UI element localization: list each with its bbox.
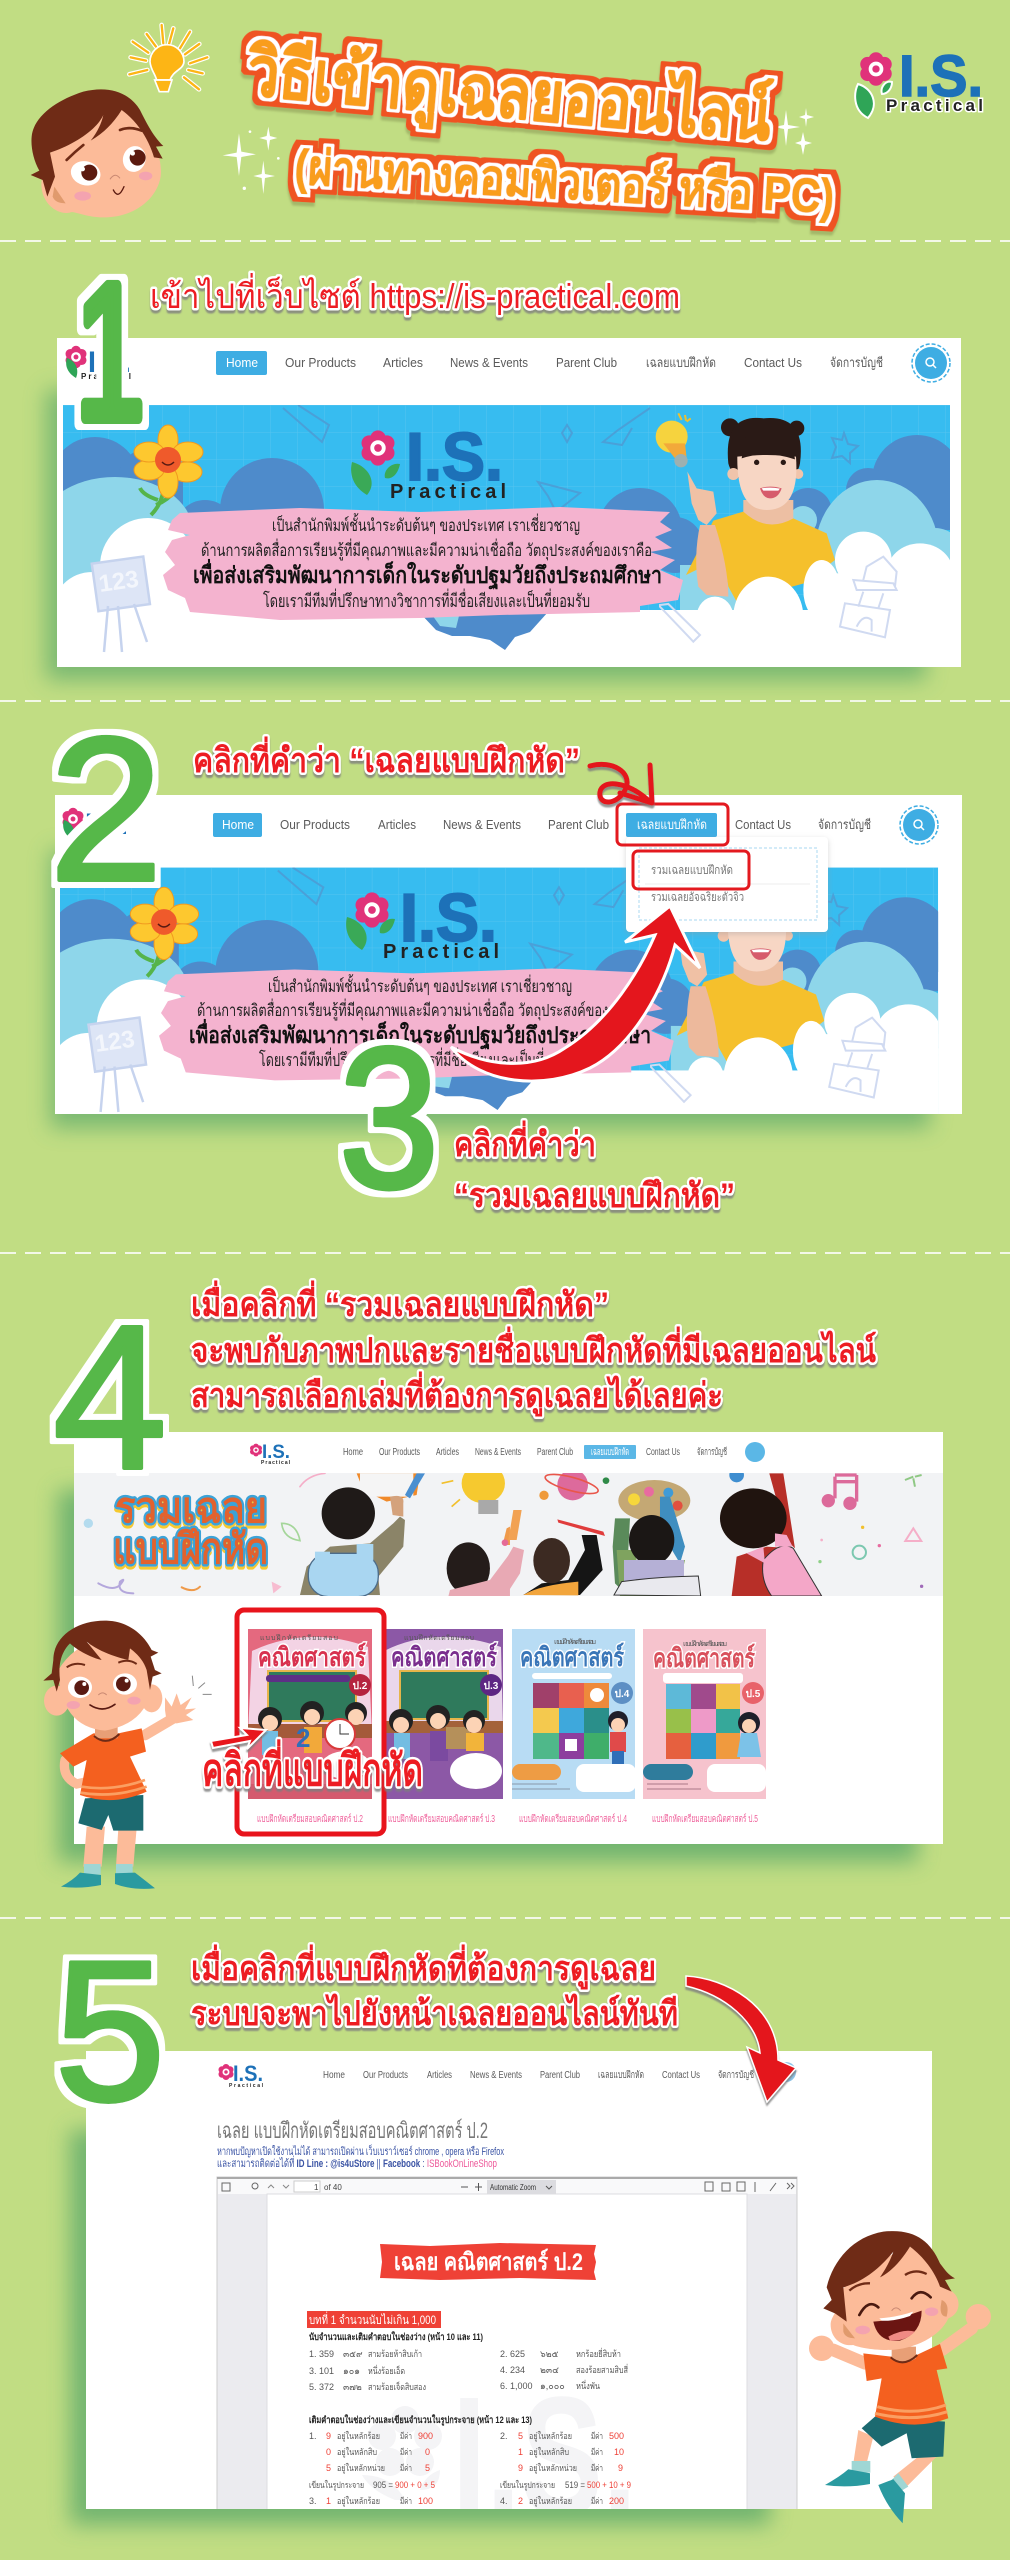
- logo: [66, 346, 131, 381]
- step 4 text: จะพบกับภาพปกและรายชื่อแบบฝึกหัดที่มีเฉลยออนไลน์: [191, 1326, 876, 1370]
- nav bar: จัดการบัญชี: [830, 355, 883, 370]
- banner copy: โดยเรามีทีมที่ปรึกษาทางวิชาการที่มีชื่อเสียงและเป็นที่ยอมรับ: [259, 1047, 582, 1070]
- highlight box: menu item: [617, 804, 728, 845]
- logo: Practical: [81, 372, 131, 381]
- answers section 2: 0: [326, 2447, 331, 2457]
- answers section 1: 1. 359: [309, 2349, 334, 2359]
- answers section 2: มีค่า: [400, 2431, 412, 2441]
- nav bar: Our Products: [280, 817, 350, 832]
- book cover: grade 3: ป.3: [484, 1680, 499, 1692]
- nav bar: Articles: [378, 817, 416, 832]
- step 3 text: คลิกที่คำว่า: [454, 1120, 596, 1164]
- nav bar: Parent Club: [556, 355, 617, 370]
- book cover: grade 4: คณิตศาสตร์: [520, 1642, 624, 1672]
- answers section 2: 2: [518, 2496, 523, 2506]
- answers section 1: 6. 1,000: [500, 2381, 533, 2391]
- panel: step 1 website: [37, 338, 965, 680]
- book cover: grade 2: ป.2: [353, 1680, 368, 1692]
- book cover: grade 4: [512, 1629, 636, 1799]
- logo: Practical: [229, 2083, 264, 2089]
- watermark: [362, 2396, 628, 2509]
- book cover: grade 4: แบบฝึกหัดเตรียมสอบ: [554, 1637, 596, 1646]
- book cover: grade 2: คณิตศาสตร์: [258, 1642, 366, 1672]
- answers section 2: อยู่ในหลักหน่วย: [337, 2463, 385, 2474]
- logo: I.S.: [88, 346, 131, 379]
- number 2: 2: [49, 695, 163, 924]
- answers section 2: 100: [418, 2496, 433, 2506]
- pdf viewer: [216, 2176, 798, 2509]
- banner logo: Practical: [390, 481, 506, 503]
- logo: Practical: [261, 1460, 291, 1466]
- answers section 2: 9: [326, 2431, 331, 2441]
- nav bar: News & Events: [470, 2070, 522, 2081]
- answers section 2: เขียนในรูปกระจาย: [309, 2480, 364, 2491]
- highlight box: first book: [237, 1610, 384, 1834]
- panel: step 2 menu: [34, 795, 962, 1133]
- nav bar: เฉลยแบบฝึกหัด: [591, 1446, 629, 1458]
- answers section 1: สามร้อยห้าสิบเก้า: [368, 2349, 422, 2359]
- answers section 1: 2. 625: [500, 2349, 525, 2359]
- number 5: 5: [54, 1920, 166, 2143]
- book cover: grade 2: 2: [296, 1723, 310, 1753]
- nav bar: Contact Us: [735, 817, 791, 832]
- watermark: I.S.: [452, 2362, 637, 2552]
- photo banner: [74, 1463, 943, 1597]
- nav bar: จัดการบัญชี: [818, 817, 871, 832]
- logo top right: Practical: [886, 96, 983, 115]
- answers section 2: มีค่า: [400, 2447, 412, 2457]
- book cover: grade 5: แบบฝึกหัดเตรียมสอบ: [683, 1639, 727, 1648]
- answers section 1: หกร้อยยี่สิบห้า: [576, 2347, 621, 2359]
- nav bar: [323, 2062, 796, 2082]
- banner copy: ด้านการผลิตสื่อการเรียนรู้ที่มีคุณภาพและมีความน่าเชื่อถือ วัตถุประสงค์ของเราคือ: [197, 998, 643, 1021]
- help text: [217, 2144, 504, 2170]
- logo: [250, 1442, 291, 1466]
- nav bar: Our Products: [285, 355, 356, 370]
- banner copy: เป็นสำนักพิมพ์ชั้นนำระดับต้นๆ ของประเทศ เราเชี่ยวชาญ: [268, 974, 572, 996]
- answers section 2: 10: [614, 2447, 624, 2457]
- answers section 2: มีค่า: [591, 2447, 603, 2457]
- nav bar: [213, 806, 938, 844]
- answers section 2: 0: [425, 2447, 430, 2457]
- banner copy: [189, 974, 651, 1070]
- jumping boy: [809, 2231, 991, 2523]
- book cover: grade 5: ป.5: [746, 1688, 761, 1700]
- answers section 2: 5: [326, 2463, 331, 2473]
- step 3 text: “รวมเฉลยแบบฝึกหัด”: [454, 1177, 735, 1215]
- answers section 1: ๓๗๒: [343, 2382, 362, 2392]
- help text: และสามารถติดต่อได้ที่ ID Line : @is4uStore || Facebook : ISBookOnLineShop: [217, 2155, 497, 2170]
- answers section 2: อยู่ในหลักร้อย: [337, 2431, 380, 2442]
- banner logo: Practical: [383, 941, 499, 963]
- answers section 2: อยู่ในหลักร้อย: [529, 2496, 572, 2507]
- easel numbers: 123: [97, 566, 140, 598]
- step 4 text: สามารถเลือกเล่มที่ต้องการดูเฉลยได้เลยค่ะ: [191, 1371, 723, 1417]
- book cover: grade 2: [248, 1629, 372, 1799]
- answers section 1: สองร้อยสามสิบสี่: [576, 2363, 628, 2375]
- answers section 1: หนึ่งร้อยเอ็ด: [368, 2364, 405, 2376]
- nav bar: เฉลยแบบฝึกหัด: [637, 817, 707, 832]
- answers section 2: อยู่ในหลักร้อย: [529, 2431, 572, 2442]
- step 5 text: ระบบจะพาไปยังหน้าเฉลยออนไลน์ทันที: [191, 1993, 678, 2033]
- banner logo: I.S.: [406, 419, 503, 495]
- nav bar: Our Products: [379, 1447, 420, 1458]
- book cover: grade 3: คณิตศาสตร์: [391, 1642, 497, 1672]
- answers section 2: 5: [518, 2431, 523, 2441]
- step 2 text: คลิกที่คำว่า “เฉลยแบบฝึกหัด”: [193, 736, 580, 780]
- large arrow to page: [686, 1976, 796, 2102]
- answers section 1: ๑,๐๐๐: [540, 2381, 565, 2391]
- small red arrow: [211, 1728, 266, 1749]
- pdf toolbar: 1: [314, 2183, 319, 2192]
- nav bar: Articles: [427, 2070, 452, 2081]
- pdf page: [267, 2194, 747, 2524]
- logo: [62, 808, 128, 841]
- book cover: grade 4: ป.4: [615, 1688, 630, 1700]
- sparkles left: [223, 127, 280, 194]
- nav bar: จัดการบัญชี: [718, 2069, 754, 2081]
- answers section 2: 500: [609, 2431, 624, 2441]
- answers section 2: อยู่ในหลักสิบ: [337, 2447, 377, 2458]
- nav bar: Articles: [436, 1447, 459, 1458]
- title line 2: (ผ่านทางคอมพิวเตอร์ หรือ PC): [293, 140, 836, 224]
- nav bar: จัดการบัญชี: [697, 1446, 727, 1458]
- banner copy: โดยเรามีทีมที่ปรึกษาทางวิชาการที่มีชื่อเสียงและเป็นที่ยอมรับ: [263, 588, 590, 611]
- answers section 1: ๑๐๑: [343, 2366, 360, 2376]
- nav bar: Parent Club: [537, 1447, 573, 1458]
- number 3: 3: [339, 1007, 439, 1230]
- answers section 2: 200: [609, 2496, 624, 2506]
- step 3 text: [454, 1120, 735, 1215]
- nav bar: Our Products: [363, 2070, 408, 2081]
- book cover: grade 3: [384, 1629, 503, 1799]
- answers section 2: 905 =: [373, 2480, 393, 2490]
- answers section 1: นับจำนวนและเติมคำตอบในช่องว่าง (หน้า 10 และ 11): [309, 2331, 483, 2343]
- answers section 2: 5: [425, 2463, 430, 2473]
- logo: I.S.: [85, 808, 128, 841]
- answers section 1: 3. 101: [309, 2366, 334, 2376]
- dropdown menu: รวมเฉลยแบบฝึกหัด: [651, 863, 733, 877]
- nav bar: Parent Club: [548, 817, 609, 832]
- step 4 text: เมื่อคลิกที่ “รวมเฉลยแบบฝึกหัด”: [191, 1280, 609, 1324]
- banner copy: เป็นสำนักพิมพ์ชั้นนำระดับต้นๆ ของประเทศ เราเชี่ยวชาญ: [272, 513, 580, 535]
- book captions: แบบฝึกหัดเตรียมสอบคณิตศาสตร์ ป.4: [519, 1813, 627, 1825]
- answers section 1: 4. 234: [500, 2365, 525, 2375]
- banner copy: ด้านการผลิตสื่อการเรียนรู้ที่มีคุณภาพและมีความน่าเชื่อถือ วัตถุประสงค์ของเราคือ: [201, 538, 652, 561]
- book cover: grade 2: แบบฝึกหัดเตรียมสอบ: [260, 1633, 338, 1642]
- banner copy: เพื่อส่งเสริมพัฒนาการเด็กในระดับปฐมวัยถึงประถมศึกษา: [193, 558, 662, 590]
- nav bar: [343, 1442, 765, 1462]
- answers section 2: 500 + 10 + 9: [587, 2480, 631, 2490]
- book cover: grade 3: แบบฝึกหัดเตรียมสอบ: [404, 1633, 474, 1642]
- logo top right: I.S.: [899, 44, 983, 109]
- answer title: [380, 2243, 596, 2280]
- answers section 2: มีค่า: [591, 2463, 603, 2473]
- hero banner: [37, 405, 965, 673]
- logo top right: [855, 44, 983, 118]
- banner copy: เพื่อส่งเสริมพัฒนาการเด็กในระดับปฐมวัยถึงประถมศึกษา: [189, 1018, 651, 1050]
- answers section 1: ๓๕๙: [343, 2349, 363, 2359]
- click label: คลิกที่แบบฝึกหัด: [202, 1739, 423, 1795]
- answers section 2: 1: [326, 2496, 331, 2506]
- answers section 2: 519 =: [565, 2480, 585, 2490]
- nav bar: Home: [343, 1447, 363, 1458]
- answers section 2: 2.: [500, 2431, 508, 2441]
- chapter heading: บทที่ 1 จำนวนนับไม่เกิน 1,000: [309, 2311, 436, 2327]
- banner copy: [193, 513, 662, 611]
- answers section 1: [309, 2331, 628, 2392]
- logo: I.S.: [233, 2061, 263, 2086]
- answers section 2: 9: [518, 2463, 523, 2473]
- answers section 2: มีค่า: [591, 2431, 603, 2441]
- answers section 2: 4.: [500, 2496, 508, 2506]
- number 1: 1: [75, 245, 145, 460]
- answers section 2: 900 + 0 + 5: [395, 2480, 435, 2490]
- book cover: grade 5: คณิตศาสตร์: [653, 1643, 755, 1673]
- answers section 2: อยู่ในหลักสิบ: [529, 2447, 569, 2458]
- nav bar: Contact Us: [744, 355, 802, 370]
- nav bar: Home: [222, 817, 254, 832]
- title: [244, 31, 836, 224]
- icon: light bulb: [129, 25, 207, 92]
- answers section 2: อยู่ในหลักร้อย: [337, 2496, 380, 2507]
- panel: step 5 answer page: [70, 2051, 932, 2552]
- highlight box: dropdown item: [633, 851, 749, 889]
- answers section 1: สามร้อยเจ็ดสิบสอง: [368, 2380, 426, 2392]
- pdf toolbar: [218, 2179, 796, 2194]
- answers section 2: 1: [518, 2447, 523, 2457]
- nav bar: เฉลยแบบฝึกหัด: [598, 2069, 644, 2081]
- big curved arrow: [451, 906, 700, 1081]
- easel numbers: 123: [93, 1026, 136, 1058]
- nav bar: เฉลยแบบฝึกหัด: [646, 355, 716, 370]
- waving boy: [43, 1621, 212, 1889]
- answers section 1: ๒๓๔: [540, 2365, 559, 2375]
- banner logo: [351, 419, 506, 503]
- nav bar: Contact Us: [646, 1447, 680, 1458]
- answers section 2: เติมคำตอบในช่องว่างและเขียนจำนวนในรูปกระจาย (หน้า 12 และ 13): [309, 2414, 532, 2427]
- dropdown menu: รวมเฉลยอัจฉริยะตัวจิ๋ว: [651, 887, 744, 904]
- pdf toolbar: Automatic Zoom: [490, 2183, 536, 2192]
- nav bar: Home: [226, 355, 258, 370]
- book captions: แบบฝึกหัดเตรียมสอบคณิตศาสตร์ ป.2: [257, 1813, 363, 1825]
- answers section 2: มีค่า: [591, 2496, 603, 2506]
- logo: I.S.: [262, 1442, 290, 1463]
- answers section 1: 5. 372: [309, 2382, 334, 2392]
- logo: [218, 2061, 264, 2089]
- step 4 text: [191, 1280, 876, 1417]
- nav bar: News & Events: [443, 817, 521, 832]
- answers section 2: เขียนในรูปกระจาย: [500, 2480, 555, 2491]
- answers section 2: อยู่ในหลักหน่วย: [529, 2463, 577, 2474]
- answers section 2: 1.: [309, 2431, 317, 2441]
- step 5 text: [191, 1944, 678, 2033]
- banner heading: [113, 1484, 268, 1572]
- number 4: 4: [53, 1283, 167, 1512]
- sparkles right: [774, 108, 814, 155]
- step 5 text: เมื่อคลิกที่แบบฝึกหัดที่ต้องการดูเฉลย: [191, 1944, 656, 1990]
- boy head with curious face: [31, 89, 163, 217]
- nav bar: Contact Us: [662, 2070, 700, 2081]
- title line 1: วิธีเข้าดูเฉลยออนไลน์: [244, 31, 775, 160]
- page heading: เฉลย แบบฝึกหัดเตรียมสอบคณิตศาสตร์ ป.2: [217, 2118, 488, 2143]
- answers section 2: มีค่า: [400, 2496, 412, 2506]
- book captions: [257, 1813, 758, 1825]
- book captions: แบบฝึกหัดเตรียมสอบคณิตศาสตร์ ป.3: [388, 1813, 495, 1825]
- nav bar: Home: [323, 2070, 345, 2081]
- small hooked arrow: [590, 764, 652, 803]
- step 1 text: เข้าไปที่เว็บไซต์ https://is-practical.com: [150, 273, 680, 316]
- answers section 1: ๖๒๕: [540, 2349, 559, 2359]
- dropdown menu: [626, 837, 828, 932]
- answers section 2: [309, 2414, 631, 2507]
- nav bar: Articles: [383, 355, 423, 370]
- answers section 1: หนึ่งพัน: [576, 2379, 600, 2391]
- banner heading: แบบฝึกหัด: [113, 1525, 268, 1572]
- banner logo: [346, 892, 498, 958]
- answer title: เฉลย คณิตศาสตร์ ป.2: [394, 2248, 583, 2276]
- hero banner: [60, 868, 938, 1114]
- answers section 2: 900: [418, 2431, 433, 2441]
- banner logo: I.S.: [400, 880, 497, 956]
- answers section 2: มีค่า: [400, 2463, 412, 2473]
- help text: หากพบปัญหาเปิดใช้งานไม่ได้ สามารถเปิดผ่าน เว็บเบราว์เซอร์ chrome , opera หรือ Firefox: [217, 2144, 504, 2158]
- answers section 2: 9: [618, 2463, 623, 2473]
- nav bar: Parent Club: [540, 2070, 580, 2081]
- nav bar: [216, 344, 950, 382]
- panel: step 4 workbook list: [58, 1432, 943, 1862]
- book cover: grade 5: [643, 1629, 766, 1799]
- book captions: แบบฝึกหัดเตรียมสอบคณิตศาสตร์ ป.5: [652, 1813, 758, 1825]
- pdf toolbar: of 40: [324, 2183, 342, 2192]
- nav bar: News & Events: [475, 1447, 521, 1458]
- answers section 2: 3.: [309, 2496, 317, 2506]
- banner heading: รวมเฉลย: [115, 1484, 267, 1531]
- nav bar: News & Events: [450, 355, 528, 370]
